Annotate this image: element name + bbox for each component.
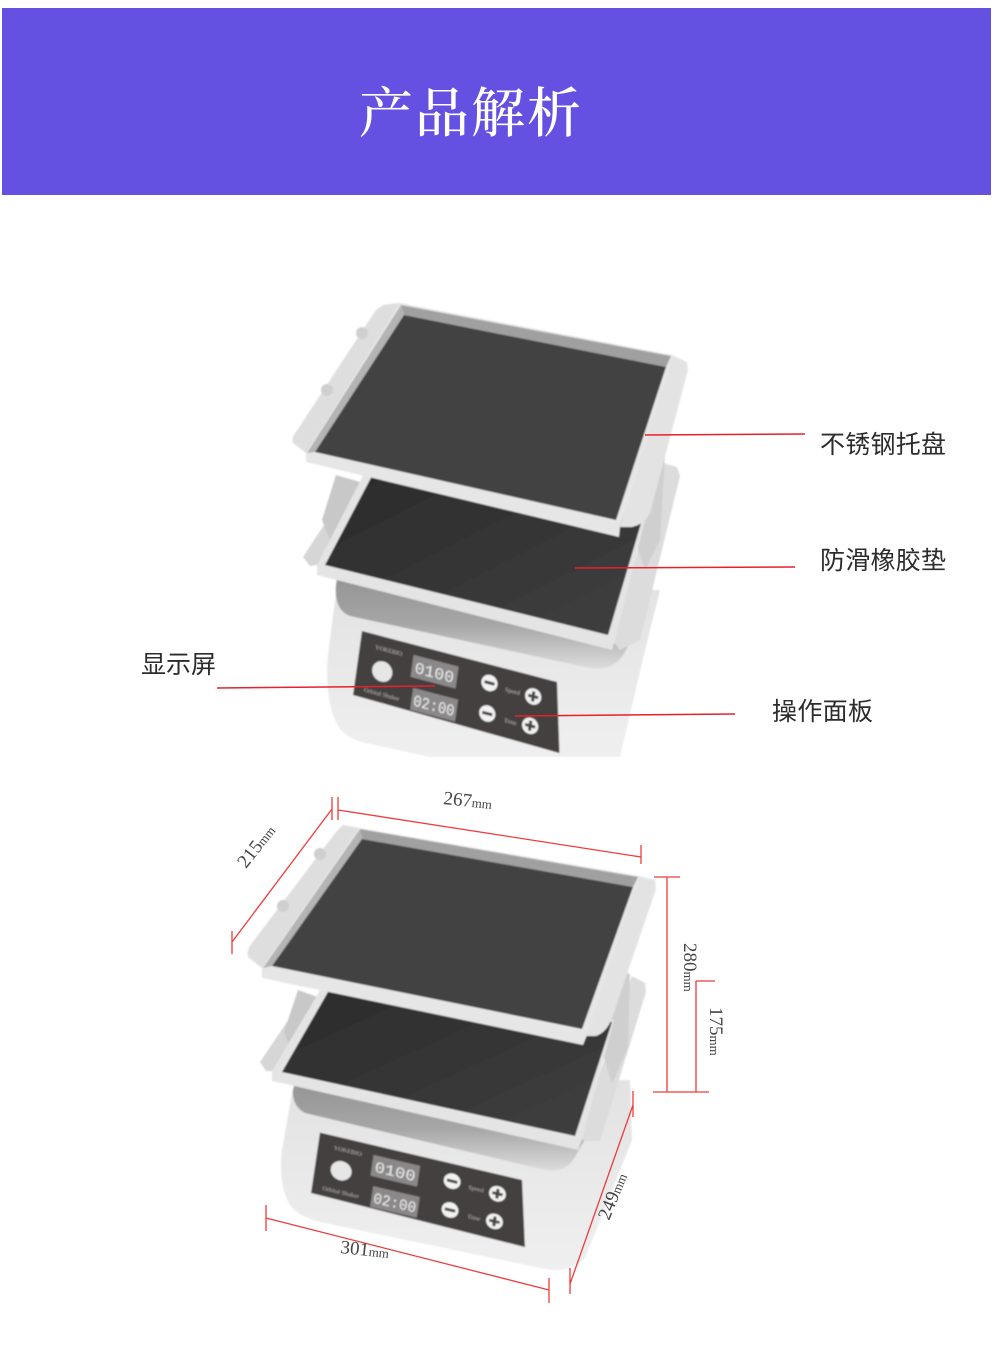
minus and plus buttons xyxy=(476,673,544,736)
display time xyxy=(410,688,458,722)
control panel: 02:00 xyxy=(372,1190,417,1217)
lower tray left flange xyxy=(260,995,327,1071)
upper tray knobs xyxy=(321,327,368,396)
lower mat xyxy=(282,985,612,1136)
control panel: Speed xyxy=(505,687,520,697)
upper tray right flange xyxy=(620,355,688,527)
stainless tray surface xyxy=(315,315,666,520)
lower tray right flange xyxy=(578,976,646,1141)
display speed xyxy=(370,1155,420,1187)
upper tray frame xyxy=(262,828,639,1045)
leader line: control panel xyxy=(515,714,735,716)
base well xyxy=(336,560,640,669)
dimension text 215mm: 215mm xyxy=(233,821,280,872)
dimension text 175mm: 175 mm xyxy=(705,1007,726,1056)
small labels: YOKEBIO xyxy=(375,645,403,658)
small labels: YOKEBIO xyxy=(333,1146,363,1158)
label: rubber mat: 防滑橡胶垫 xyxy=(820,547,946,575)
support arm right xyxy=(632,450,665,570)
label: stainless tray: 不锈钢托盘 xyxy=(820,431,946,459)
dimension 249 xyxy=(570,1091,633,1294)
header banner xyxy=(2,8,991,195)
control panel: 0100 xyxy=(414,659,455,688)
base well xyxy=(293,1066,590,1171)
anti-slip rubber mat xyxy=(325,474,642,635)
label: control panel: 操作面板 xyxy=(772,698,873,726)
control panel: 02:00 xyxy=(412,692,456,721)
support arm left xyxy=(322,475,360,540)
control panel: Orbital Shaker xyxy=(364,688,400,703)
leader line: tray xyxy=(645,434,805,435)
upper tray frame xyxy=(306,303,672,537)
control panel: Time xyxy=(467,1214,481,1223)
label: display: 显示屏 xyxy=(141,651,216,679)
upper tray inner rim xyxy=(401,305,671,367)
control panel xyxy=(310,1133,534,1247)
round button xyxy=(371,659,394,684)
display time xyxy=(370,1186,420,1218)
base body xyxy=(327,585,660,757)
lower tray frame xyxy=(272,982,614,1150)
upper tray surface xyxy=(272,839,633,1029)
control panel: 0100 xyxy=(374,1160,416,1186)
round button xyxy=(329,1159,353,1183)
dimension text 280mm: 280 mm xyxy=(679,943,700,992)
support arm right xyxy=(598,966,630,1084)
upper tray right flange xyxy=(583,876,656,1036)
control panel xyxy=(352,631,569,753)
control panel: Speed xyxy=(468,1185,484,1194)
base body xyxy=(281,1080,632,1270)
upper tray left flange xyxy=(292,303,400,453)
control panel: Orbital Shaker xyxy=(322,1186,359,1200)
upper tray left flange xyxy=(248,825,359,968)
title: 产品解析 xyxy=(359,84,583,144)
leader line: rubber mat xyxy=(575,567,795,568)
control panel: Time xyxy=(503,718,517,727)
upper tray inner rim xyxy=(360,829,638,887)
dimension text 301mm: 301mm xyxy=(339,1237,390,1263)
product illustration: dimensioned shaker xyxy=(248,825,656,1270)
upper tray left rim xyxy=(263,829,362,968)
dimension 280 xyxy=(653,877,709,1092)
dimension text 267mm: 267mm xyxy=(442,788,493,814)
dimension 175 xyxy=(696,981,715,1092)
dimension lines xyxy=(232,797,715,1303)
leader line: display xyxy=(217,686,435,688)
lower tray frame xyxy=(317,470,645,650)
lower tray right flange xyxy=(612,463,680,650)
dimension 215 xyxy=(232,797,332,954)
dimension 301 xyxy=(266,1205,549,1303)
dimension 267 xyxy=(338,797,641,864)
minus and plus buttons xyxy=(438,1172,508,1231)
support arm left xyxy=(284,990,320,1048)
dimension text 249mm: 249mm xyxy=(594,1170,632,1223)
display speed xyxy=(411,655,459,689)
upper tray left rim xyxy=(307,305,404,453)
upper tray knobs xyxy=(277,848,326,912)
lower tray left flange xyxy=(303,483,368,566)
product illustration: labelled shaker xyxy=(292,303,688,757)
